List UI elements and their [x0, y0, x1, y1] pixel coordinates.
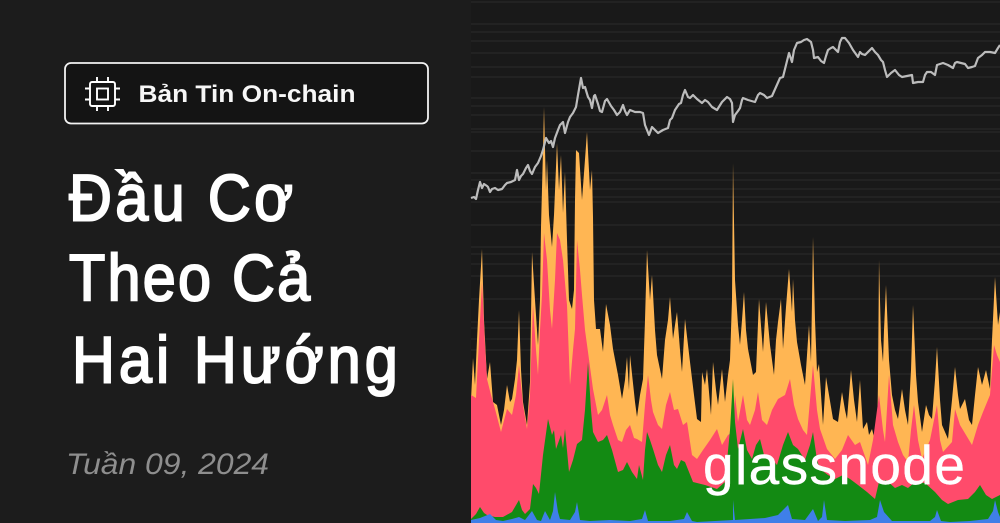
red area series — [471, 233, 1000, 523]
left panel — [0, 0, 471, 523]
price line — [471, 38, 1000, 199]
orange area series — [471, 107, 1000, 523]
green area series — [471, 362, 1000, 523]
badge label: Bản Tin On-chain — [138, 81, 356, 108]
date line: Tuần 09, 2024 — [66, 448, 269, 481]
panel: chart — [471, 0, 1000, 523]
badge: Bản Tin On-chain — [65, 63, 428, 124]
title: Theo Cả — [69, 242, 310, 315]
blue area series — [471, 492, 1000, 523]
title: Hai Hướng — [72, 324, 398, 397]
title — [69, 162, 398, 397]
icon: microchip — [85, 77, 120, 111]
title: Đầu Cơ — [69, 162, 293, 235]
logo: glassnode: glassnode — [703, 434, 965, 496]
